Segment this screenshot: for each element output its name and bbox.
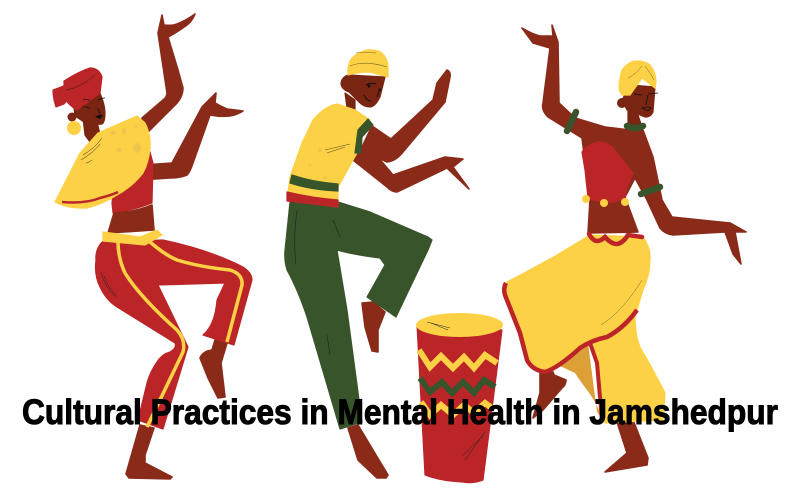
centre dancer sleeve cuff xyxy=(355,119,373,153)
right dancer face features xyxy=(634,93,658,111)
figure: centre dancer in green and yellow xyxy=(285,50,469,478)
left dancer cape xyxy=(55,116,150,208)
centre dancer head xyxy=(341,75,385,107)
right dancer arms and torso xyxy=(522,25,746,264)
drum zigzag yellow upper xyxy=(419,350,497,368)
left dancer pants xyxy=(96,240,252,429)
right dancer skirt under fold xyxy=(558,343,605,423)
left dancer crop top xyxy=(112,145,153,213)
centre dancer trousers xyxy=(285,202,432,429)
left dancer earring xyxy=(67,121,81,135)
left dancer raised foot xyxy=(200,340,227,398)
right dancer bodice xyxy=(582,142,633,202)
right dancer bodice bells xyxy=(582,195,629,207)
centre dancer near arm xyxy=(362,70,450,162)
drum xyxy=(416,313,503,483)
right dancer skirt red seam xyxy=(590,343,602,420)
centre dancer neck xyxy=(345,93,355,112)
left dancer second arm xyxy=(140,93,243,180)
right dancer front skirt xyxy=(503,235,650,372)
drum top xyxy=(416,313,503,337)
left dancer raised arm xyxy=(142,14,195,132)
drum zigzag green xyxy=(420,378,495,393)
right dancer back skirt xyxy=(593,315,665,423)
figure: left dancer in red and yellow xyxy=(53,14,252,479)
left dancer standing foot xyxy=(126,425,172,479)
left dancer cape texture xyxy=(110,124,141,153)
left dancer turban knot xyxy=(53,85,69,107)
left dancer pant stripes xyxy=(118,242,242,427)
right dancer skirt red hem xyxy=(504,283,637,372)
left dancer turban xyxy=(64,68,102,110)
right dancer head xyxy=(622,85,655,117)
right dancer turban xyxy=(619,61,656,95)
left dancer ear xyxy=(68,112,76,122)
centre dancer shirt xyxy=(287,104,370,207)
right dancer necklace xyxy=(627,126,643,128)
centre dancer raised foot xyxy=(362,302,385,352)
centre dancer far arm xyxy=(353,147,469,192)
figure: right dancer in yellow skirt xyxy=(503,25,746,472)
left dancer face features xyxy=(82,98,105,114)
right dancer back leg xyxy=(533,372,566,418)
right dancer waist ruffle xyxy=(589,234,642,244)
left dancer head xyxy=(73,93,105,124)
right dancer upper bangle xyxy=(567,112,576,131)
centre dancer face features xyxy=(364,83,380,101)
centre dancer turban xyxy=(348,50,388,77)
right dancer neck xyxy=(628,108,642,127)
left dancer neck xyxy=(83,118,100,142)
centre dancer shirt green stripe xyxy=(290,175,338,191)
drum zigzag yellow lower xyxy=(421,402,492,415)
right dancer ear xyxy=(617,98,627,108)
left dancer cape red trim xyxy=(62,192,118,202)
left dancer belt xyxy=(103,230,162,245)
centre dancer standing foot xyxy=(348,425,388,478)
right dancer front leg xyxy=(605,420,648,472)
right dancer lower bangle xyxy=(641,187,660,194)
drum body xyxy=(417,325,502,483)
left dancer waist xyxy=(108,205,154,233)
centre dancer shirt red stripe xyxy=(287,192,338,207)
